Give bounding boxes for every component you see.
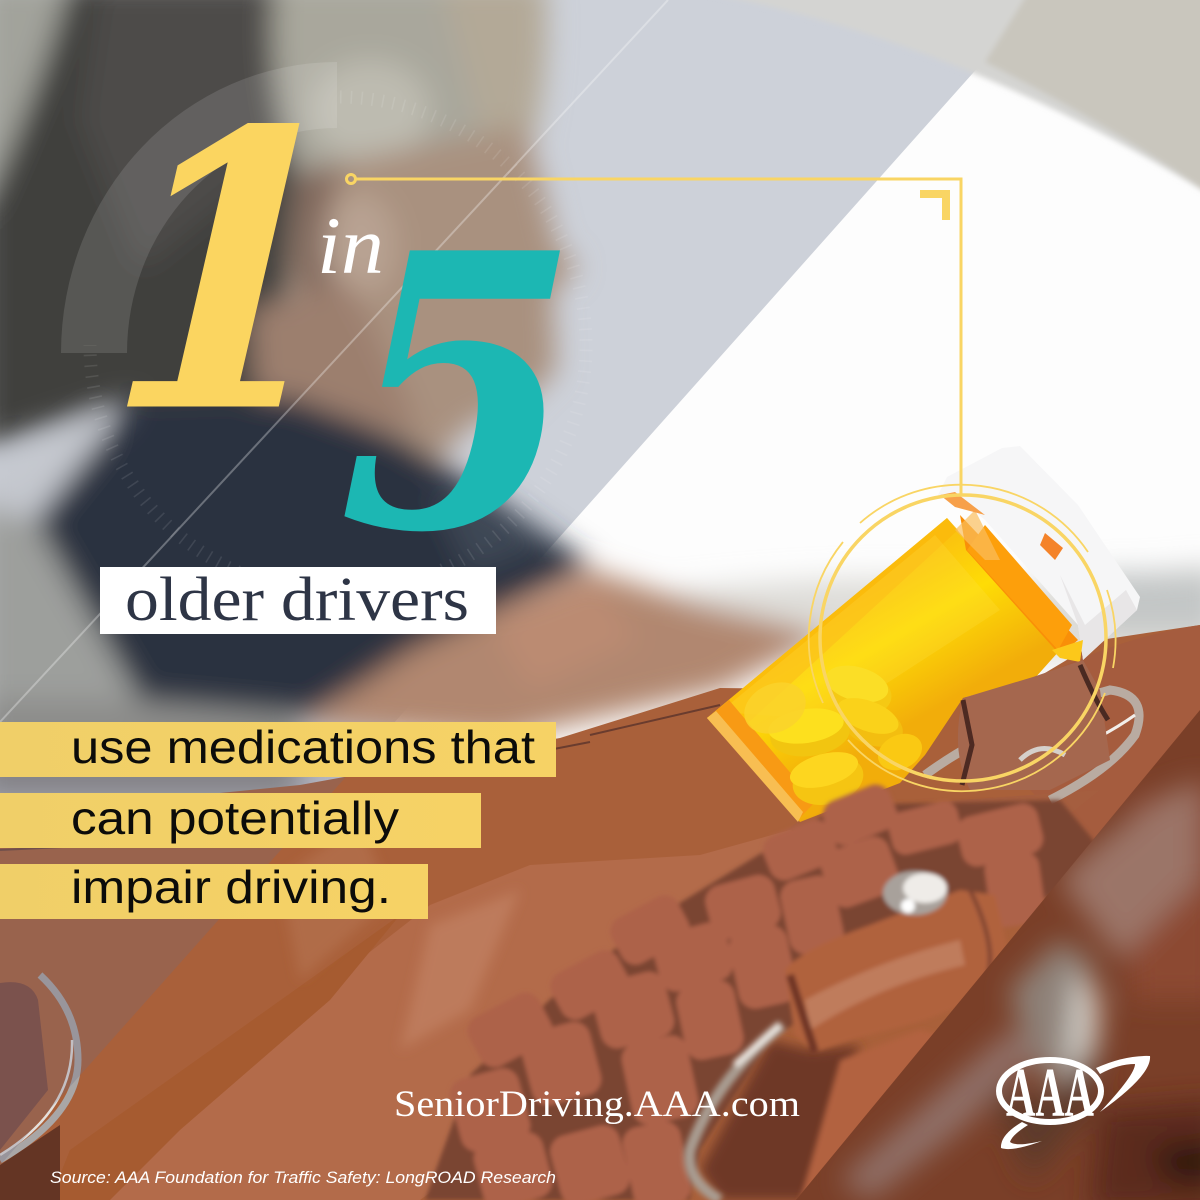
- yellow text bars: impair driving.: [71, 861, 391, 913]
- website: SeniorDriving.AAA.com: [394, 1084, 800, 1125]
- numeral 5: 5: [297, 172, 620, 616]
- pills: [736, 659, 928, 812]
- bottle body: [707, 518, 1060, 822]
- yellow text bars: [0, 721, 556, 919]
- dial decoration: band and ticks: [61, 62, 586, 593]
- leather keeper: [785, 890, 1015, 1052]
- metal ring lower: [689, 1025, 782, 1200]
- label: older drivers: older drivers: [125, 566, 469, 634]
- source: Source: AAA Foundation for Traffic Safety: LongROAD Research: [50, 1168, 556, 1187]
- yellow text bars: use medications that: [71, 721, 535, 773]
- numeral 1: 1: [63, 51, 392, 495]
- main leather fold below the crease: [40, 830, 900, 1200]
- braided leather strap: [425, 782, 1110, 1200]
- dark lower gap under strap: [700, 1040, 860, 1200]
- leather handbag: [0, 625, 1200, 1200]
- target rings around bottle: [809, 485, 1116, 791]
- tint: left diagonal overlay: [0, 777, 346, 1165]
- pill bottle: [707, 446, 1140, 822]
- rivet: [883, 871, 947, 915]
- thin diagonal light line: [0, 0, 668, 722]
- strap loop and metal ring: [925, 660, 1139, 800]
- tint: bottom right blurred foreground: [796, 710, 1200, 1200]
- yellow text bars: can potentially: [71, 792, 399, 844]
- callout line and corner mark: [346, 174, 961, 495]
- bottle cap: [937, 446, 1140, 660]
- word in: in: [317, 200, 384, 291]
- AAA logo: AAA: [1006, 1055, 1094, 1132]
- bottom-left ring and tab: [0, 975, 78, 1200]
